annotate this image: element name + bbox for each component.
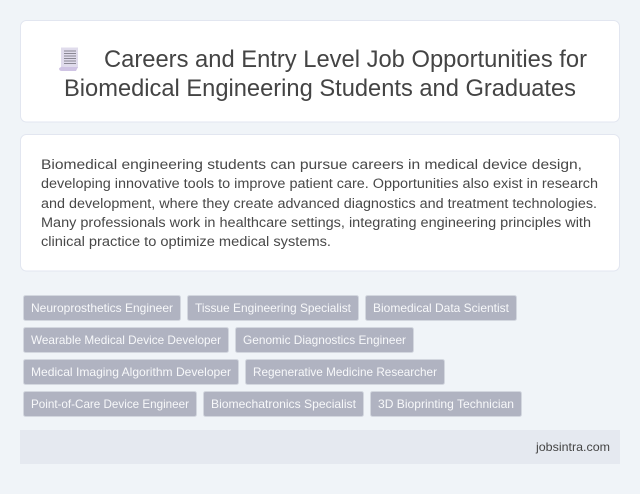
tag: Point-of-Care Device Engineer (24, 392, 196, 416)
tag: Biomedical Data Scientist: Biomedical Data Scientist (373, 301, 510, 315)
description text: clinical practice to optimize medical systems. (41, 234, 331, 250)
tag: Point-of-Care Device Engineer: Point-of-Care Device Engineer (31, 397, 189, 411)
panel: description card (20, 134, 620, 271)
description text: Biomedical engineering students can pursue careers in medical device design, (41, 157, 582, 173)
icon: scroll document (59, 48, 78, 71)
title (64, 46, 587, 102)
tag: Neuroprosthetics Engineer: Neuroprosthetics Engineer (31, 301, 173, 315)
title: Biomedical Engineering Students and Graduates (64, 75, 576, 102)
tag: Regenerative Medicine Researcher (246, 360, 444, 384)
tag: 3D Bioprinting Technician: 3D Bioprinting Technician (378, 397, 514, 411)
footer source text: jobsintra.com (535, 440, 610, 454)
tag: Medical Imaging Algorithm Developer: Medical Imaging Algorithm Developer (31, 365, 231, 379)
tag: Wearable Medical Device Developer (24, 328, 228, 352)
footer bar (20, 430, 620, 464)
title: Careers and Entry Level Job Opportunities for (104, 46, 587, 73)
tag: Biomechatronics Specialist (204, 392, 364, 416)
description text: Many professionals work in healthcare settings, integrating engineering principles with (41, 215, 591, 231)
tag: Wearable Medical Device Developer: Wearable Medical Device Developer (31, 333, 221, 347)
tag: Medical Imaging Algorithm Developer (24, 360, 238, 384)
tag: 3D Bioprinting Technician (370, 392, 522, 416)
tag: Biomechatronics Specialist: Biomechatronics Specialist (211, 397, 357, 411)
tag: Regenerative Medicine Researcher: Regenerative Medicine Researcher (253, 365, 437, 379)
tag: Genomic Diagnostics Engineer (236, 328, 414, 352)
panel: title card (20, 20, 620, 122)
tag: Tissue Engineering Specialist: Tissue Engineering Specialist (195, 301, 352, 315)
description text: and development, where they create advanced diagnostics and treatment technologies. (41, 196, 597, 212)
tag: Tissue Engineering Specialist (188, 296, 358, 320)
job tags (24, 296, 522, 416)
tag: Neuroprosthetics Engineer (24, 296, 180, 320)
description text: developing innovative tools to improve patient care. Opportunities also exist in research (41, 176, 598, 192)
tag: Biomedical Data Scientist (366, 296, 516, 320)
description text (41, 157, 598, 250)
tag: Genomic Diagnostics Engineer: Genomic Diagnostics Engineer (243, 333, 406, 347)
